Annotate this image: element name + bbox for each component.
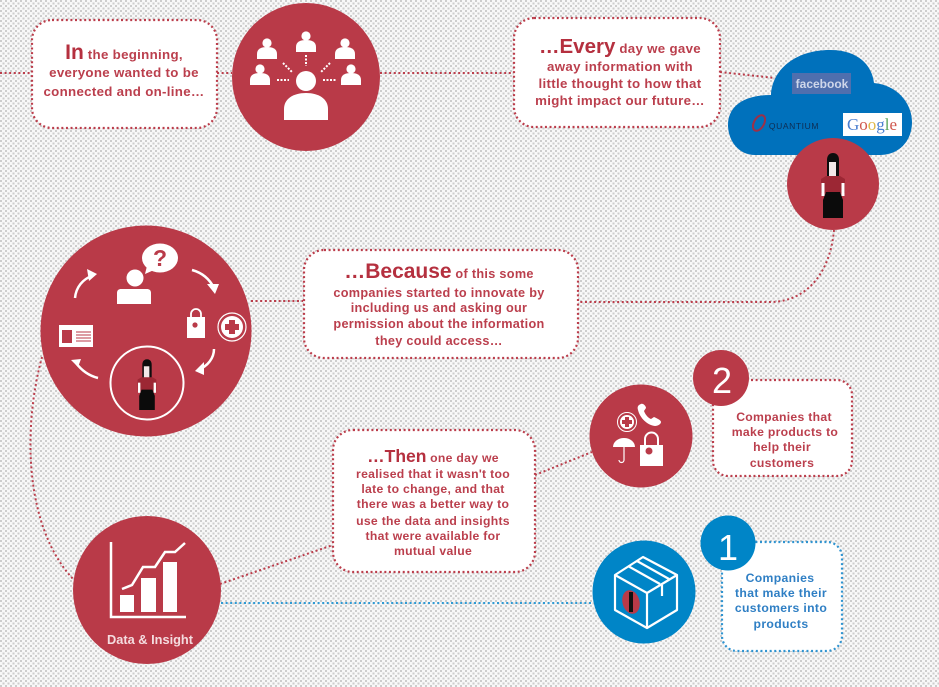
callout: customers into products: customers into (735, 601, 827, 615)
callout: companies that help customers: help their (753, 440, 811, 454)
circle: customers as products (592, 540, 696, 644)
text box: Then: use the data and insights (356, 514, 510, 528)
text box: Every day: away information with (547, 59, 693, 74)
text box: Then: there was a better way to (357, 497, 509, 511)
person with question bubble (117, 244, 178, 304)
text box: Then (333, 430, 535, 572)
callout: customers into products: products (754, 617, 808, 631)
text box: Then: …Then one day we (367, 446, 499, 466)
text box: Because: they could access… (375, 334, 503, 348)
id card icon (59, 325, 93, 347)
callout: companies that help customers (693, 350, 852, 476)
quantium logo (750, 113, 819, 133)
circle: woman (787, 138, 879, 230)
callout: companies that help customers: make products to (732, 425, 838, 439)
facebook logo (792, 73, 851, 94)
callout: companies that help customers: Companies that (736, 410, 832, 424)
cloud with company logos (728, 50, 912, 155)
large circle: permission cycle (40, 226, 252, 436)
google logo: Google (847, 115, 897, 134)
quantium logo: QUANTIUM (769, 121, 819, 131)
icon circle: connected people (232, 3, 380, 151)
bag icon (187, 309, 205, 338)
circle: products (590, 384, 692, 488)
text box: In the beginning (32, 20, 217, 128)
number badge 1 (700, 516, 756, 570)
text box: In the beginning: everyone wanted to be (49, 65, 199, 80)
number badge 1: 1 (718, 527, 738, 568)
circle: data and insight (73, 516, 221, 664)
connector lines (0, 72, 834, 603)
facebook logo: facebook (796, 77, 849, 91)
text box: Because: including us and asking our (351, 301, 527, 315)
text box: In the beginning: connected and on-line… (43, 84, 205, 99)
text box: Then: mutual value (394, 544, 472, 558)
text box: Every day: little thought to how that (539, 76, 702, 91)
woman in ring (110, 346, 184, 420)
text box: Because (304, 250, 578, 358)
text box: Every day: …Every day we gave (539, 35, 701, 58)
text box: In the beginning: In the beginning, (65, 41, 183, 64)
circle: data and insight: Data & Insight (107, 632, 194, 647)
text box: Every day (514, 18, 720, 127)
text box: Because: permission about the information (333, 317, 545, 331)
text box: Then: that were available for (366, 529, 500, 543)
callout: customers into products: that make their (735, 586, 827, 600)
person with question bubble: ? (153, 245, 167, 271)
text box: Because: …Because of this some (344, 260, 534, 283)
number badge 2: 2 (712, 360, 732, 401)
text box: Then: realised that it wasn't too (356, 467, 510, 481)
text box: Every day: might impact our future… (535, 93, 705, 108)
text box: Then: late to change, and that (361, 482, 505, 496)
number badge 2 (693, 350, 749, 406)
callout: companies that help customers: customers (750, 456, 814, 470)
medical icon (218, 313, 246, 341)
callout: customers into products (700, 516, 842, 651)
callout: customers into products: Companies (746, 571, 814, 585)
cycle arrows (71, 269, 219, 378)
text box: Because: companies started to innovate by (333, 286, 545, 300)
